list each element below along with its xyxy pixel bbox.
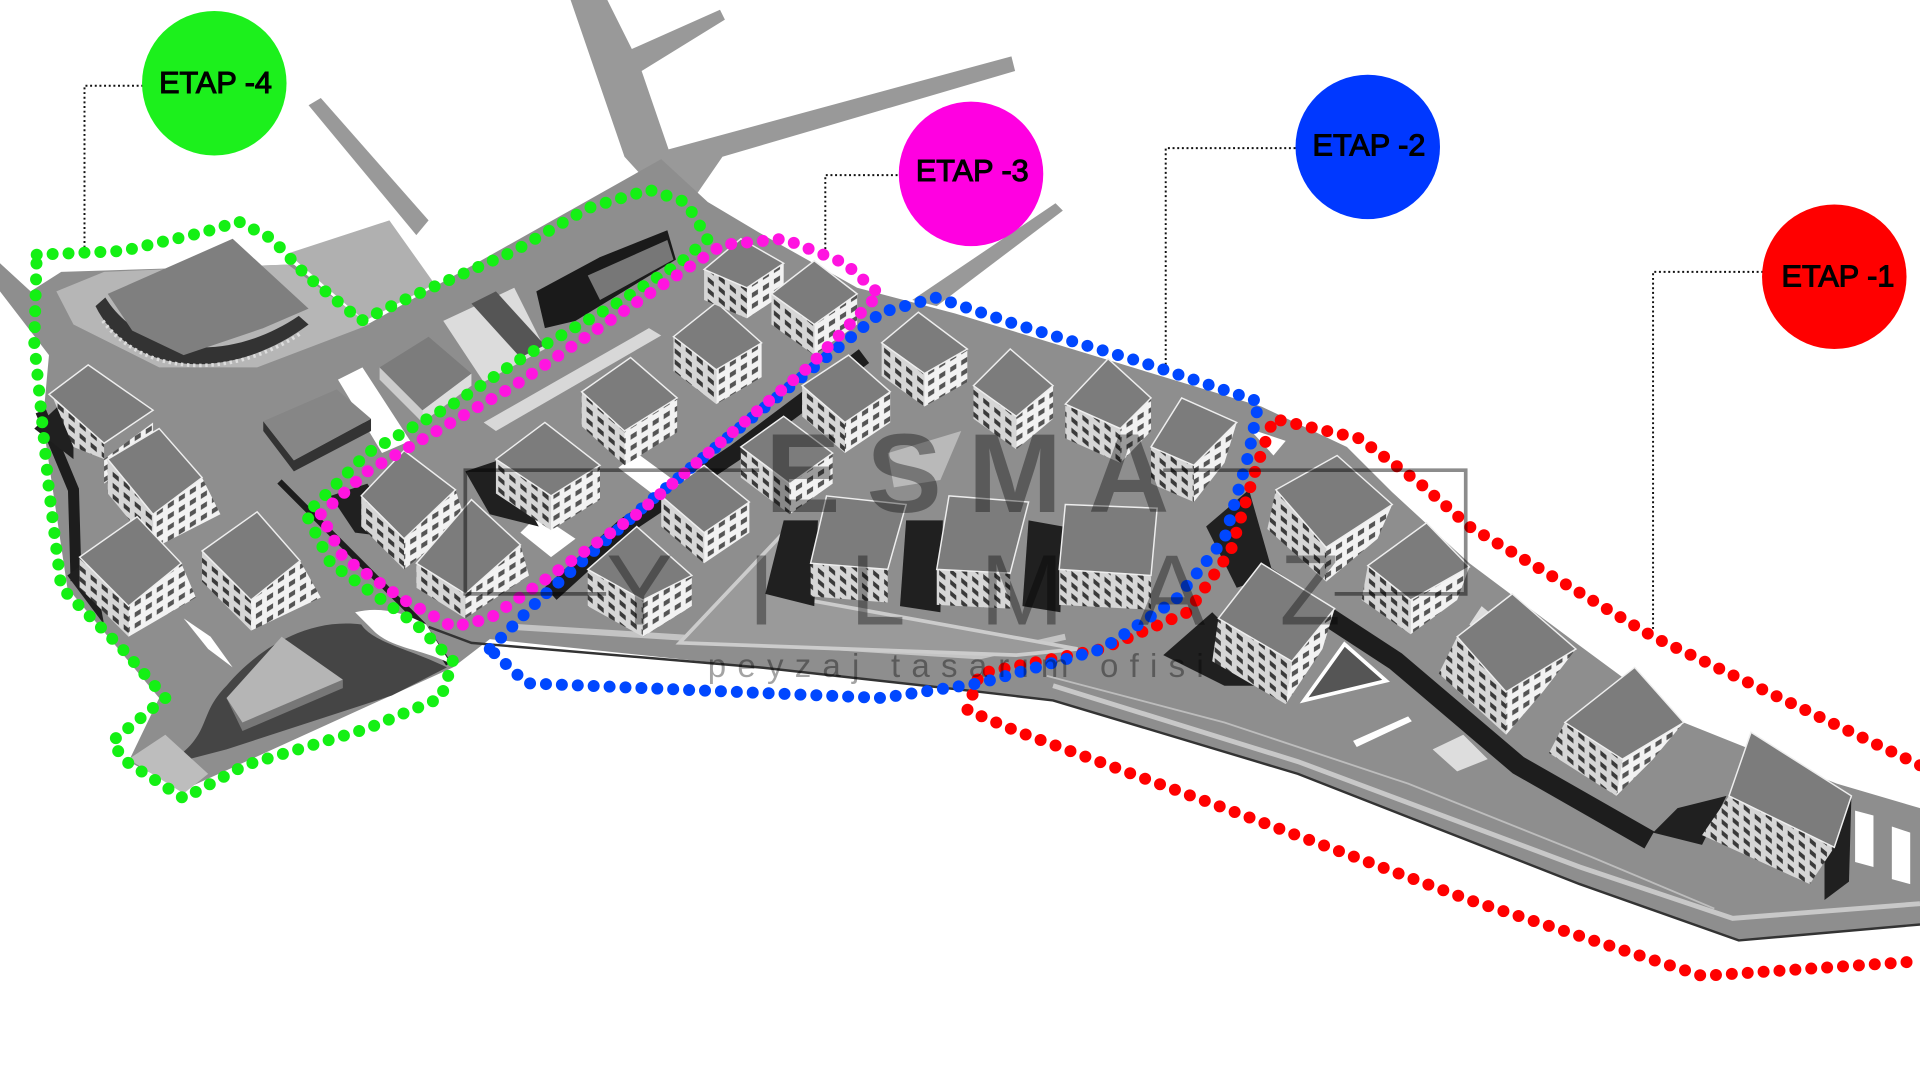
- buildings: etap 3: [361, 239, 857, 618]
- landscaped pond: [165, 624, 447, 765]
- planter triangle: [1304, 644, 1386, 700]
- courtyards and parking: [184, 288, 1910, 884]
- leader: etap 4: [84, 86, 143, 251]
- watermark: [465, 410, 1466, 685]
- boundary: etap 2 blue: [490, 298, 1259, 698]
- leader: etap 2: [1166, 148, 1296, 365]
- leader: etap 3: [825, 175, 898, 251]
- arena: [96, 239, 309, 365]
- badge: etap 3: [899, 102, 1043, 246]
- boundary: etap 4 green: [34, 190, 708, 798]
- sports hall: [263, 389, 371, 471]
- lot bottom triangle: [680, 533, 1078, 655]
- road edge: [429, 627, 1920, 940]
- access roads north: [309, 0, 1063, 306]
- buildings: etap 4: [49, 365, 321, 637]
- main ground: [0, 159, 1920, 940]
- badge: etap 4: ETAP -4: [159, 66, 272, 100]
- badge: etap 2: ETAP -2: [1313, 129, 1425, 163]
- buildings: etap 1: [1212, 456, 1851, 884]
- badge: etap 4: [142, 11, 287, 156]
- white cove beside pond: [355, 610, 451, 664]
- mosque: [380, 337, 471, 422]
- pavilion: [227, 637, 343, 731]
- watermark: ESMA: [765, 410, 1169, 536]
- lawn: [129, 735, 208, 793]
- badge: etap 1: [1762, 204, 1907, 349]
- pale plot: [288, 220, 435, 321]
- shadows: [43, 361, 1641, 835]
- plaza: [888, 431, 961, 487]
- boundary: etap 3 magenta: [321, 239, 879, 627]
- watermark: YILMAZ: [606, 534, 1341, 646]
- watermark: peyzaj tasarım ofisi: [708, 648, 1204, 685]
- buildings: etap 2: [588, 312, 1237, 637]
- badge: etap 2: [1296, 75, 1440, 219]
- badge: etap 1: ETAP -1: [1782, 260, 1894, 294]
- badge: etap 3: ETAP -3: [916, 154, 1029, 188]
- leader: etap 1: [1653, 272, 1763, 631]
- boundary: etap 1 red: [967, 419, 1920, 976]
- dark block: [536, 230, 676, 328]
- road light strip: [1053, 686, 1920, 918]
- arena forecourt: [56, 264, 370, 367]
